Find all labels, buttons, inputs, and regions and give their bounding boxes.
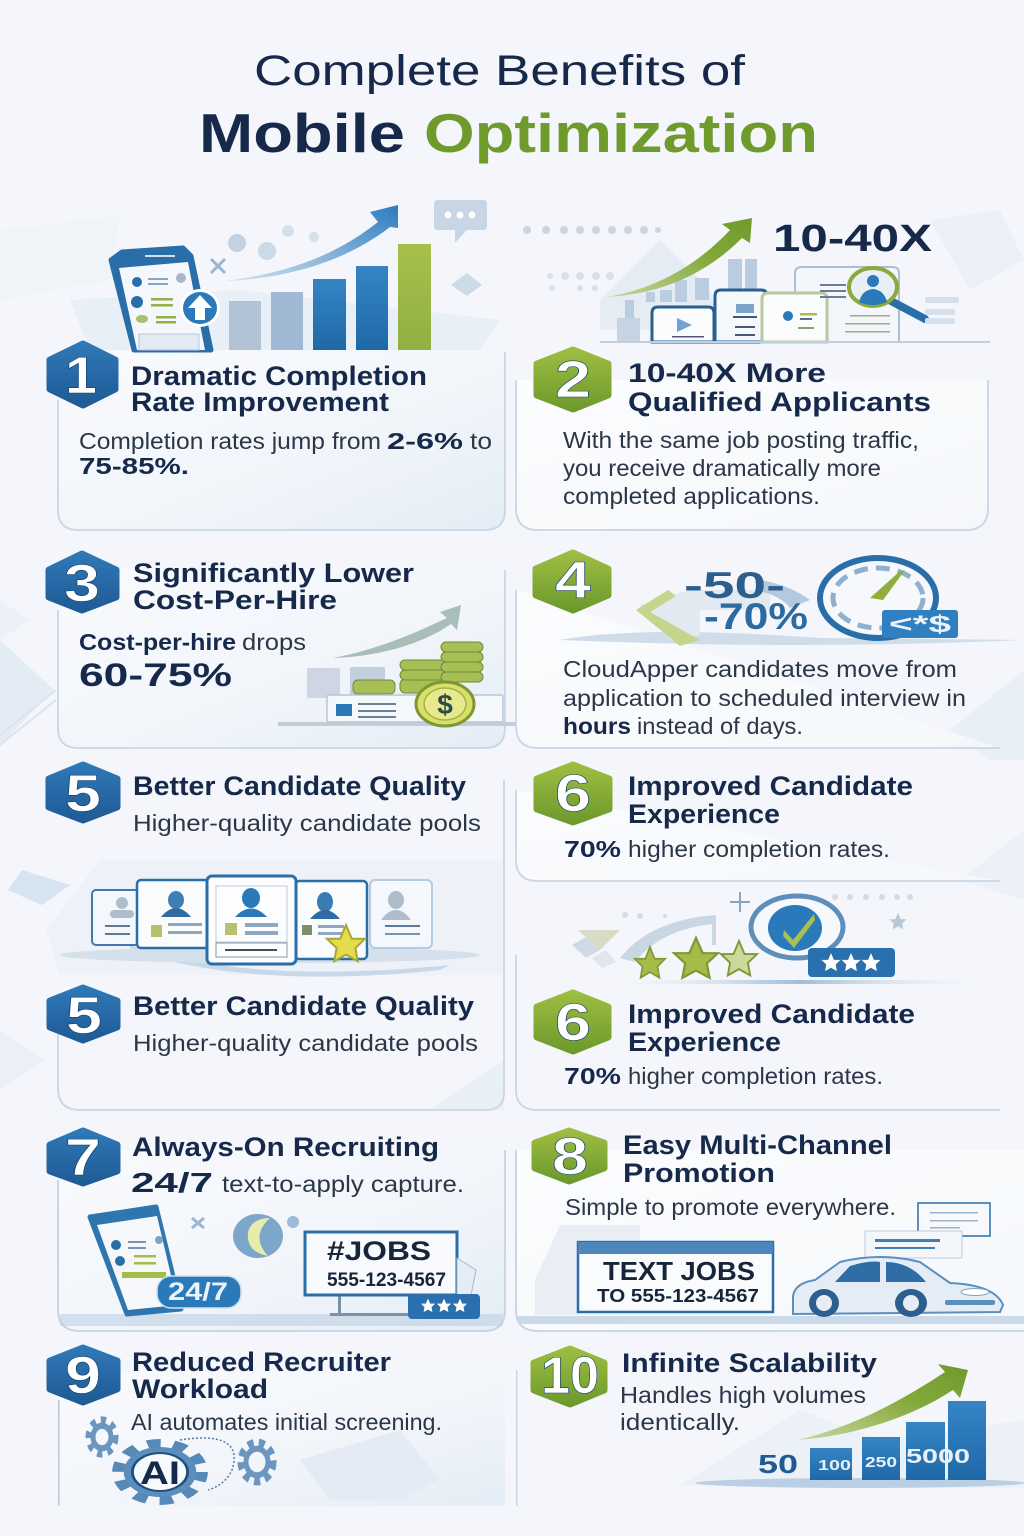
number badge 6: 6 <box>555 765 591 823</box>
card background <box>516 790 1000 881</box>
illustration: gauge and percentages: -70% <box>704 596 808 637</box>
title: Complete Benefits of <box>254 47 746 95</box>
body 5: Higher-quality candidate pools <box>133 810 481 836</box>
body 8: Simple to promote everywhere. <box>565 1194 896 1220</box>
body 3: 60-75% <box>79 657 232 693</box>
card left edge <box>516 1370 518 1506</box>
number badge 10: 10 <box>541 1347 599 1405</box>
number badge 7 <box>50 1129 117 1187</box>
body 7 <box>131 1167 464 1198</box>
body 7: 24/7 <box>131 1167 213 1198</box>
heading 3 <box>133 558 415 615</box>
heading 6 <box>628 771 913 829</box>
body 2: completed applications. <box>563 483 820 509</box>
card outline <box>58 570 505 748</box>
illustration: rising volume bars: 5000 <box>906 1446 970 1468</box>
card outline <box>58 1150 505 1331</box>
body 4: hours <box>563 713 631 739</box>
illustration: rising volume bars: 250 <box>865 1454 897 1471</box>
illustration: rating target and stars <box>572 892 1010 984</box>
heading 6: Experience <box>628 799 780 829</box>
body 7: text-to-apply capture. <box>222 1171 464 1197</box>
illustration: AI gears <box>89 1421 440 1500</box>
body 4: CloudApper candidates move from <box>563 656 957 682</box>
body 6 repeat: 70% <box>564 1063 621 1089</box>
heading 9 <box>132 1347 392 1404</box>
heading 3: Cost-Per-Hire <box>133 585 337 615</box>
panel: 7 always-on recruiting <box>50 1129 505 1331</box>
panel: 5 candidate quality (lower) <box>50 780 504 1110</box>
panel: 4 time to interview <box>516 552 1024 748</box>
body 10 <box>620 1382 866 1435</box>
heading 2: 10-40X More <box>628 358 826 388</box>
heading 5 repeat: Better Candidate Quality <box>133 991 474 1021</box>
number badge 6 <box>537 765 609 823</box>
number badge 5 repeat <box>50 987 117 1045</box>
illustration: gauge and percentages <box>560 558 1024 646</box>
number badge 7: 7 <box>65 1129 101 1187</box>
illustration: gauge and percentages: <*$ <box>889 611 952 638</box>
heading 2 <box>628 358 931 417</box>
illustration: phone and rising bars <box>111 200 487 350</box>
body 4: application to scheduled interview in <box>563 685 966 711</box>
heading 6 repeat <box>628 999 915 1057</box>
heading 6 repeat: Experience <box>628 1027 781 1057</box>
number badge 9 <box>50 1347 117 1405</box>
body 3 <box>79 629 306 693</box>
illustration: rising volume bars <box>680 1364 1024 1488</box>
card outline <box>516 955 1000 1110</box>
body 2: you receive dramatically more <box>563 455 881 481</box>
heading 1: Dramatic Completion <box>131 361 427 391</box>
illustration: phone, moon, sign: 555-123-4567 <box>327 1270 446 1291</box>
body 6: higher completion rates. <box>628 836 890 862</box>
panel: 2 qualified applicants <box>516 218 990 530</box>
heading 1: Rate Improvement <box>131 387 389 417</box>
card left edge <box>58 1400 60 1506</box>
illustration: candidate profile cards <box>60 876 480 977</box>
card background <box>516 380 988 530</box>
number badge 8: 8 <box>552 1128 588 1186</box>
panel: 10 infinite scalability <box>516 1347 1024 1506</box>
panel: 8 multi-channel promotion <box>516 1128 1024 1331</box>
body 4 <box>563 656 966 739</box>
body 3: drops <box>242 629 306 655</box>
body 1: 2-6% <box>387 428 463 454</box>
illustration: rising volume bars: 50 <box>758 1449 798 1479</box>
title <box>199 47 818 164</box>
number badge 4: 4 <box>555 552 591 610</box>
heading 8: Easy Multi-Channel <box>623 1130 892 1160</box>
body 10: Handles high volumes <box>620 1382 866 1408</box>
body 2 <box>563 427 919 509</box>
body 1: Completion rates jump from <box>79 428 381 454</box>
illustration: coins and arrow: $ <box>437 689 453 720</box>
number badge 9: 9 <box>65 1347 101 1405</box>
number badge 5: 5 <box>65 765 101 823</box>
illustration: sign, bubbles and car <box>518 1203 1024 1324</box>
body 9: AI automates initial screening. <box>131 1409 442 1435</box>
heading 5: Better Candidate Quality <box>133 771 466 801</box>
body 4: instead of days. <box>637 713 803 739</box>
illustration: phone, moon, sign <box>60 1207 503 1326</box>
illustration: documents, magnifier, arrow <box>523 218 990 343</box>
illustration: sign, bubbles and car: TEXT JOBS <box>603 1256 755 1286</box>
body 10: identically. <box>620 1409 740 1435</box>
heading 1 <box>131 361 427 417</box>
number badge 4 <box>536 552 608 610</box>
heading 2: Qualified Applicants <box>628 387 931 417</box>
illustration: sign, bubbles and car: TO 555-123-4567 <box>597 1286 759 1306</box>
number badge 1 <box>50 344 115 405</box>
panel: 6 candidate experience (lower) <box>516 955 1000 1110</box>
card background <box>59 1370 505 1506</box>
background decorative shapes <box>0 210 1024 1110</box>
number badge 5 <box>49 765 117 823</box>
heading 9: Reduced Recruiter <box>132 1347 392 1377</box>
card background <box>516 590 1000 748</box>
card outline <box>58 352 505 530</box>
heading 8 <box>623 1130 892 1188</box>
heading 10: Infinite Scalability <box>622 1348 877 1378</box>
illustration: rising volume bars: 100 <box>818 1457 851 1474</box>
number badge 8 <box>535 1128 604 1186</box>
title: Mobile <box>199 102 405 164</box>
number badge 3: 3 <box>64 555 100 613</box>
body 5 repeat: Higher-quality candidate pools <box>133 1030 478 1056</box>
number badge 5 repeat: 5 <box>66 987 102 1045</box>
number badge 3 <box>49 554 116 613</box>
heading 3: Significantly Lower <box>133 558 415 588</box>
panel: 9 recruiter workload <box>50 1347 505 1506</box>
body 1: to <box>470 428 492 454</box>
number badge 6 repeat: 6 <box>555 994 591 1052</box>
illustration: phone, moon, sign: #JOBS <box>327 1236 431 1266</box>
card outline <box>516 1150 1024 1331</box>
panel: 6 candidate experience (upper) <box>516 765 1010 984</box>
title: Optimization <box>424 102 818 164</box>
body 3: Cost-per-hire <box>79 629 236 655</box>
illustration: gauge and percentages: -50- <box>684 565 785 606</box>
illustration: AI gears: AI <box>140 1455 180 1491</box>
illustration: phone, moon, sign: 24/7 <box>168 1278 228 1306</box>
card background <box>516 1150 1024 1331</box>
heading 7: Always-On Recruiting <box>132 1132 439 1162</box>
body 2: With the same job posting traffic, <box>563 427 919 453</box>
panel: 5 candidate quality (upper) <box>49 765 481 977</box>
number badge 1: 1 <box>65 347 97 405</box>
heading 6: Improved Candidate <box>628 771 913 801</box>
number badge 2 <box>537 350 608 409</box>
body 1: 75-85%. <box>79 453 189 479</box>
heading 8: Promotion <box>623 1158 775 1188</box>
panel: 1 completion rate <box>50 200 505 530</box>
card outline <box>58 780 504 1110</box>
number badge 2: 2 <box>555 351 591 409</box>
body 6 repeat: higher completion rates. <box>628 1063 883 1089</box>
card background <box>58 568 505 748</box>
illustration: documents, magnifier, arrow: 10-40X <box>773 218 933 260</box>
body 6: 70% <box>564 836 621 862</box>
card background <box>58 1150 505 1331</box>
heading 9: Workload <box>132 1374 268 1404</box>
number badge 6 repeat <box>537 993 608 1052</box>
heading 6 repeat: Improved Candidate <box>628 999 915 1029</box>
body 1 <box>79 428 492 479</box>
illustration: coins and arrow <box>278 605 542 726</box>
panel: 3 cost per hire <box>49 554 542 748</box>
card background <box>58 350 505 530</box>
